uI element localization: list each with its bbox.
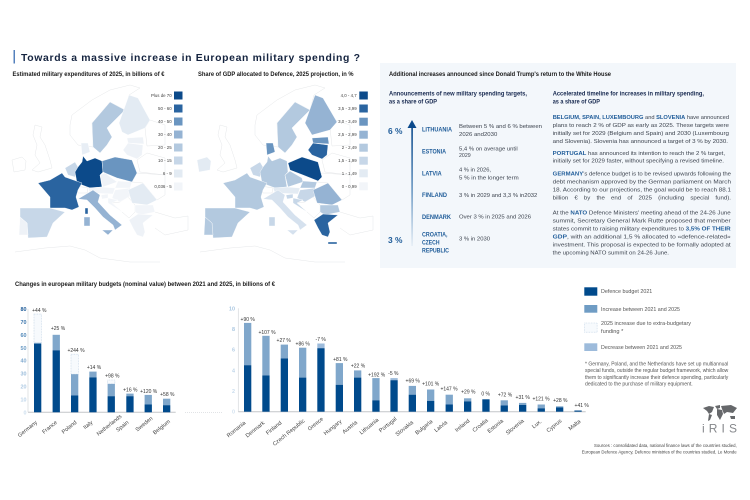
- country labels: Austria: [342, 419, 360, 436]
- country labels: Ireland: [454, 418, 471, 434]
- percentage labels: +72 %: [498, 392, 513, 398]
- list of country targets: ESTONIA: [422, 148, 446, 156]
- country labels: Czech Republic: [272, 418, 306, 448]
- legend: military expenditures: 30 - 40: [158, 132, 172, 137]
- y axis: [20, 307, 26, 416]
- list of country targets: 3 % in 2030: [459, 236, 491, 242]
- percentage labels: +14 %: [87, 365, 102, 371]
- legend: share of GDP: 1,5 - 1,99: [338, 158, 357, 163]
- footnote: * Germany, Poland, and the Netherlands have set up multiannual: [585, 361, 728, 367]
- heading: military expenditures map: Estimated military expenditures of 2025, in billions of €: [12, 72, 165, 78]
- y axis: 70: [20, 320, 26, 326]
- country labels: Greece: [307, 416, 325, 433]
- percentage labels: +44 %: [32, 308, 47, 314]
- percentage labels: -5 %: [388, 371, 399, 377]
- list of country targets: 3 % in 2029 and 3,3 % in2032: [459, 193, 537, 199]
- legend: military expenditures: 6 - 9: [163, 171, 172, 176]
- text block: Germany: [553, 172, 732, 202]
- bar chart: smaller budgets: [226, 306, 589, 448]
- column heading: new targets: as a share of GDP: [389, 99, 437, 105]
- map: military expenditures: [12, 85, 188, 262]
- bars: [244, 323, 582, 412]
- country labels: Germany: [17, 420, 39, 439]
- legend: share of GDP: 1 - 1,49: [342, 171, 357, 176]
- percentage labels: +58 %: [160, 392, 175, 398]
- list of country targets: CROATIA,: [422, 232, 448, 238]
- percentage labels: +107 %: [258, 330, 276, 336]
- legend: share of GDP: 4,0 - 4,7: [341, 93, 357, 98]
- y axis: 40: [20, 359, 26, 365]
- percentage labels: +69 %: [406, 379, 420, 385]
- text block: Portugal: initially set for 2029 faster, without specifying a revised timeline.: [553, 159, 724, 165]
- legend: military expenditures: 20 - 25: [158, 145, 172, 150]
- title: Towards a massive increase in European military spending ?: [21, 53, 360, 64]
- text block: Germany: billion € by the end of 2025 (including special fund).: [553, 196, 731, 202]
- bars: [34, 314, 170, 412]
- panel heading: Additional increases announced since Donald Trump's return to the White House: [389, 72, 612, 78]
- percentage labels: 0 %: [481, 391, 491, 397]
- logo: IRIS: [702, 405, 737, 436]
- y axis: 50: [20, 346, 26, 352]
- text block: NATO: summit, Secretary General Mark Rutte proposed that member: [553, 218, 731, 224]
- y axis: 0: [24, 410, 26, 416]
- list of country targets: Over 3 % in 2025 and 2026: [459, 215, 532, 221]
- percentage labels: +22 %: [351, 364, 366, 370]
- legend: military expenditures: 10 - 15: [158, 158, 172, 163]
- country labels: Portugal: [378, 416, 398, 434]
- y axis: [229, 306, 235, 416]
- legend: bar charts: [584, 287, 691, 351]
- legend: share of GDP: 2 - 2,49: [342, 145, 357, 150]
- country labels: Poland: [61, 420, 78, 436]
- country labels: Netherlands: [96, 414, 123, 438]
- country labels: Estonia: [487, 418, 506, 435]
- text block: Belgium, Spain, Luxembourg, Slovenia: [553, 115, 730, 145]
- list of country targets: LATVIA: [422, 170, 442, 178]
- footnote: special funds, outside the regular budget framework, which allow: [585, 368, 728, 374]
- list of country targets: Between 5 % and 6 % between: [459, 124, 542, 130]
- country labels: [226, 416, 583, 448]
- percentage labels: +31 %: [516, 395, 530, 401]
- percentage labels: +86 %: [296, 341, 310, 347]
- text block: Belgium, Spain, Luxembourg, Slovenia: initially set for 2029 (Belgium and Spain) and 2030 (Luxembourg: [553, 131, 729, 137]
- percentage labels: +90 %: [241, 317, 255, 323]
- legend: share of GDP: 3,0 - 3,49: [338, 119, 357, 124]
- legend: bar charts: Decrease between 2021 and 2025: [601, 345, 682, 351]
- percentage labels: -7 %: [316, 337, 326, 343]
- legend: share of GDP: 3,5 - 3,99: [338, 106, 357, 111]
- legend: share of GDP: [338, 92, 368, 190]
- legend: military expenditures: [151, 92, 182, 190]
- footnote: them to significantly increase their defence spending, particularly: [585, 375, 729, 381]
- legend: bar charts: 2025 increase due to extra-budgetary: [601, 321, 691, 327]
- list of country targets: 2026 and2030: [459, 132, 498, 138]
- percentage labels: +41 %: [575, 403, 589, 409]
- text block: NATO: states commit to raising military expenditures to 3,5% OF THEIR: [553, 226, 731, 232]
- logo: IRIS: iRIS: [702, 422, 737, 436]
- text block: NATO: At the NATO Defence Ministers' meeting ahead of the 24-26 June: [553, 210, 731, 216]
- country labels: Malta: [568, 418, 583, 432]
- legend: bar charts: Defence budget 2021: [601, 289, 652, 295]
- sources: [582, 443, 737, 455]
- legend: military expenditures: 50 - 60: [158, 106, 172, 111]
- y axis: 6: [232, 348, 235, 354]
- country labels: Bulgaria: [415, 418, 435, 436]
- column heading: accelerated timeline: [553, 91, 704, 105]
- column heading: new targets: [389, 91, 527, 105]
- legend: share of GDP: 0 - 0,99: [342, 184, 357, 189]
- y axis: 60: [20, 333, 26, 339]
- panel: additional increases: [380, 63, 736, 268]
- country labels: Spain: [115, 420, 130, 434]
- percentage labels: [241, 317, 589, 409]
- y axis: 0: [232, 410, 235, 416]
- list of country targets: 5 % in the longer term: [459, 175, 519, 181]
- country labels: Lux.: [531, 419, 544, 430]
- column heading: accelerated timeline: as a share of GDP: [553, 99, 600, 105]
- percentage labels: +27 %: [277, 338, 291, 344]
- bar chart: largest budgets: [17, 307, 223, 439]
- legend: military expenditures: 0,036 - 5: [154, 184, 172, 189]
- footnote: [585, 361, 729, 387]
- percentage labels: +192 %: [368, 373, 386, 379]
- percentage labels: +120 %: [140, 389, 158, 395]
- text block: NATO: investment. This proposal is expected to be formally adopted at: [553, 242, 731, 248]
- list of country targets: 5,4 % on average until: [459, 146, 518, 152]
- country labels: Finland: [265, 420, 283, 437]
- country labels: Hungary: [323, 419, 343, 437]
- list of country targets: [422, 124, 542, 254]
- legend: bar charts: Increase between 2021 and 2025: [601, 307, 680, 313]
- percentage labels: +28 %: [553, 398, 568, 404]
- text block: Portugal: PORTUGAL has announced its intention to reach the 2 % target,: [553, 151, 725, 157]
- country labels: Cyprus: [546, 418, 563, 434]
- percentage labels: +121 %: [532, 397, 550, 403]
- country labels: Belgium: [152, 419, 172, 436]
- country labels: Denmark: [245, 420, 266, 439]
- heading: budget changes charts: Changes in european military budgets (nominal value) between 2021 and 2025, in billions of €: [15, 282, 276, 288]
- legend: bar charts: funding *: [601, 329, 623, 335]
- country labels: Slovakia: [395, 419, 416, 438]
- scale arrow 3 % to 6 %: [388, 120, 416, 246]
- text block: Germany: debt mechanism approved by the German parliament on March: [553, 180, 731, 186]
- scale arrow 3 % to 6 %: 3 %: [388, 235, 403, 245]
- country labels: Italy: [83, 420, 94, 431]
- percentage labels: +98 %: [105, 374, 120, 380]
- y axis: 10: [20, 398, 26, 404]
- percentage labels: [32, 308, 175, 398]
- list of country targets: FINLAND: [422, 192, 447, 199]
- map: share of GDP: [197, 85, 373, 262]
- text block: NATO: the upcoming NATO summit on 24-26 June.: [553, 250, 669, 256]
- country labels: Romania: [226, 420, 248, 439]
- column heading: new targets: Announcements of new military spending targets,: [389, 91, 527, 97]
- y axis: 80: [20, 307, 26, 313]
- country labels: [17, 414, 172, 439]
- list of country targets: REPUBLIC: [422, 248, 449, 254]
- y axis: 2: [232, 389, 235, 395]
- list of country targets: CZECH: [422, 240, 440, 246]
- legend: military expenditures: Plus de 70: [151, 93, 172, 98]
- percentage labels: +147 %: [440, 386, 458, 392]
- y axis: 20: [20, 385, 26, 391]
- sources: Sources : consolidated data, national finance laws of the countries studied,: [594, 443, 737, 449]
- text block: NATO: [553, 210, 732, 256]
- text block: Germany: 18. According to our projections, the goal would be to reach 88.1: [553, 188, 731, 194]
- country labels: Lithuania: [359, 417, 381, 436]
- country labels: Slovenia: [505, 418, 526, 437]
- text block: NATO: GDP , with an additional 1,5 % allocated to «defence-related»: [553, 234, 732, 240]
- list of country targets: 4 % in 2026,: [459, 167, 491, 173]
- list of country targets: 2029: [459, 153, 471, 159]
- percentage labels: +29 %: [461, 389, 476, 395]
- y axis: 10: [229, 306, 235, 312]
- scale arrow 3 % to 6 %: 6 %: [388, 126, 403, 136]
- footnote: dedicated to the purchase of military equipment.: [585, 381, 693, 387]
- percentage labels: +25 %: [51, 326, 66, 332]
- text block: Portugal: [553, 151, 725, 165]
- country labels: Croatia: [472, 417, 490, 434]
- percentage labels: +81 %: [333, 357, 348, 363]
- y axis: 8: [232, 327, 235, 333]
- text block: Germany: GERMANY's defence budget is to be revised upwards following the: [553, 172, 732, 178]
- y axis: 30: [20, 372, 26, 378]
- y axis: 4: [232, 368, 235, 374]
- legend: military expenditures: 40 - 50: [158, 119, 172, 124]
- list of country targets: DENMARK: [422, 214, 451, 221]
- percentage labels: +244 %: [67, 348, 85, 354]
- percentage labels: +16 %: [123, 387, 138, 393]
- list of country targets: LITHUANIA: [422, 126, 452, 134]
- percentage labels: +101 %: [422, 382, 440, 388]
- country labels: Latvia: [434, 419, 450, 434]
- column heading: accelerated timeline: Accelerated timeline for increases in military spending,: [553, 91, 704, 97]
- text block: Belgium, Spain, Luxembourg, Slovenia: BELGIUM, SPAIN, LUXEMBOURG and SLOVENIA have announced: [553, 115, 729, 121]
- legend: share of GDP: 2,5 - 2,99: [338, 132, 357, 137]
- text block: Belgium, Spain, Luxembourg, Slovenia: and Slovenia). Slovenia has announced a target of 3 % by 2030.: [553, 139, 728, 145]
- heading: share of GDP map: Share of GDP allocated to Defence, 2025 projection, in %: [198, 72, 354, 78]
- country labels: Sweden: [135, 416, 154, 433]
- country labels: France: [41, 420, 59, 436]
- text block: Belgium, Spain, Luxembourg, Slovenia: plans to reach 2 % of GDP as early as 2025. These targets were: [553, 123, 730, 129]
